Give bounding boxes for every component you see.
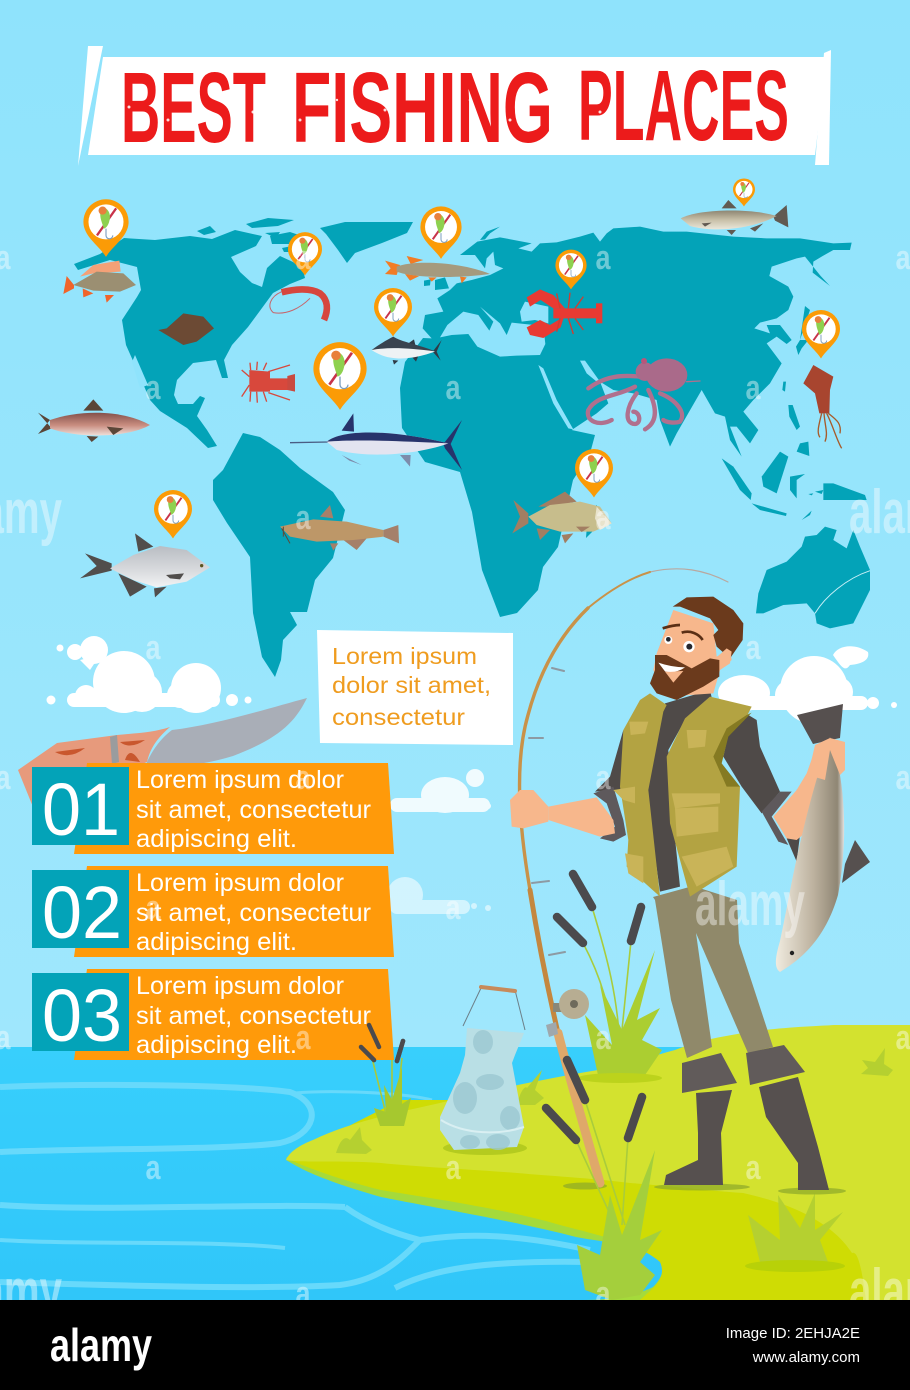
list item 01: 01: [42, 768, 120, 851]
list item 01: adipiscing elit.: [136, 825, 297, 853]
madagascar: [586, 505, 597, 538]
watermarks: a: [446, 1149, 461, 1187]
right sleeve: [723, 715, 780, 813]
sakhalin and japan: [796, 306, 810, 355]
greenland: [320, 222, 413, 263]
eyes: [664, 636, 672, 644]
sulawesi: [790, 474, 805, 498]
footer bar: www.alamy.com: [752, 1349, 860, 1366]
fisherman with rod and fish: [520, 569, 846, 1194]
watermarks: a: [596, 1275, 611, 1313]
callout box: consectetur: [332, 704, 465, 730]
fisherman upper body: [510, 597, 833, 897]
fishing rod: [520, 569, 728, 1183]
northern salmon: [681, 200, 788, 235]
title: FISHING: [292, 52, 553, 164]
tuna: [372, 337, 442, 365]
arctic islands: [197, 218, 302, 252]
head: [653, 610, 732, 697]
title: [121, 50, 789, 164]
watermarks: a: [296, 759, 311, 797]
water: [0, 1047, 910, 1300]
lip and chin: [665, 671, 683, 683]
arm behind fish: [787, 773, 817, 862]
red lobster: [527, 289, 602, 338]
java and islands: [752, 490, 823, 520]
list item 01: Lorem ipsum dolor: [136, 766, 344, 794]
eurasia and africa: [400, 227, 867, 617]
borneo: [762, 452, 788, 493]
shirt: [647, 690, 713, 892]
caught fish: [776, 704, 870, 972]
watermarks: a: [746, 629, 761, 667]
grass shore: [286, 1025, 910, 1300]
callout box: dolor sit amet,: [332, 672, 491, 698]
pike: [385, 256, 490, 283]
beard: [650, 655, 719, 700]
map location pins: [83, 178, 840, 538]
list item 02: sit amet, consectetur: [136, 899, 371, 927]
watermarks: a: [146, 369, 161, 407]
islands and australia: [752, 490, 870, 628]
salmon: [38, 399, 150, 442]
list item 03: 03: [42, 974, 122, 1057]
watermarks: a: [596, 759, 611, 797]
list item 02: [32, 866, 394, 957]
watermarks: a: [746, 1149, 761, 1187]
upper reeds: [557, 874, 662, 1083]
persian gulf: [580, 361, 600, 382]
footer bar: alamy: [50, 1319, 152, 1371]
knife: [18, 698, 307, 807]
reeds in front of list item 03: [361, 1025, 403, 1061]
marlin: [290, 413, 462, 470]
watermarks: a: [296, 499, 311, 537]
left upper sleeve: [595, 730, 627, 792]
footer bar: Image ID: 2EHJA2E: [726, 1325, 860, 1342]
smile: [658, 663, 685, 672]
pockets: [613, 722, 733, 887]
shrimp: [270, 289, 327, 320]
watermarks: a: [446, 889, 461, 927]
bream and catfish: [80, 505, 399, 597]
gripping hand: [808, 738, 845, 780]
watermarks: a: [146, 889, 161, 927]
list item 01: sit amet, consectetur: [136, 796, 371, 824]
watermarks: a: [296, 239, 311, 277]
ear: [717, 648, 732, 670]
black sea: [520, 302, 548, 323]
watermarks: a: [446, 369, 461, 407]
european islands: [424, 227, 500, 290]
grass tufts: [336, 1048, 893, 1272]
list item 03: adipiscing elit.: [136, 1031, 297, 1059]
trousers: [653, 886, 773, 1058]
new guinea: [823, 483, 867, 500]
callout box: [317, 630, 513, 745]
cloud left: [46, 636, 252, 713]
armhole: [713, 713, 752, 787]
world map: [74, 218, 870, 677]
watermarks: a: [746, 369, 761, 407]
perch: [63, 261, 136, 303]
vest left: [620, 693, 667, 897]
list item 02: Lorem ipsum dolor: [136, 869, 344, 897]
squid: [803, 365, 842, 448]
catfish: [280, 505, 399, 551]
watermarks: a: [296, 1275, 311, 1313]
octopus: [588, 358, 700, 429]
watermarks: alamy: [695, 870, 805, 939]
list item 02: 02: [42, 871, 122, 954]
watermarks: a: [146, 1149, 161, 1187]
list item 03: sit amet, consectetur: [136, 1002, 371, 1030]
watermarks: a: [596, 1019, 611, 1057]
northern fish group: [38, 256, 490, 470]
right forearm: [773, 747, 833, 840]
callout box: Lorem ipsum: [332, 643, 477, 669]
reeds by the bars: [361, 1025, 411, 1126]
lower reeds: [546, 1060, 662, 1300]
list item 01: [32, 763, 394, 854]
cloud right: [718, 646, 897, 724]
footer bar: [0, 1300, 910, 1390]
right cuff: [762, 792, 792, 845]
mediterranean: [440, 307, 545, 357]
flounder: [158, 313, 214, 345]
watermarks: a: [146, 629, 161, 667]
boot shadows: [654, 1184, 750, 1190]
red sea: [538, 365, 573, 429]
north america: [74, 230, 305, 448]
list item 03: [32, 969, 394, 1060]
taiwan and philippines: [782, 382, 809, 456]
sumatra: [722, 458, 752, 500]
clouds behind bars: [390, 769, 491, 813]
eyebrows: [663, 625, 703, 640]
bucket: [440, 987, 527, 1155]
boots: [664, 1090, 732, 1185]
title banner: [78, 46, 831, 166]
left hand: [510, 790, 548, 828]
hair: [673, 597, 743, 658]
watermarks: a: [596, 239, 611, 277]
watermarks: a: [596, 499, 611, 537]
south america: [213, 433, 345, 677]
watermarks: a: [296, 1019, 311, 1057]
carp: [512, 492, 612, 543]
watermarks: [0, 239, 910, 1326]
left cuff: [593, 787, 626, 842]
eastern sea creatures: [527, 200, 842, 448]
title: BEST: [121, 52, 266, 164]
australia: [756, 527, 870, 628]
bream: [80, 533, 210, 597]
ripples: [0, 1085, 590, 1288]
left arm: [548, 797, 615, 837]
spiny lobster: [242, 362, 295, 403]
list item 03: Lorem ipsum dolor: [136, 972, 344, 1000]
list item 02: adipiscing elit.: [136, 928, 297, 956]
vest right: [667, 697, 752, 897]
rod reel: [546, 989, 589, 1037]
